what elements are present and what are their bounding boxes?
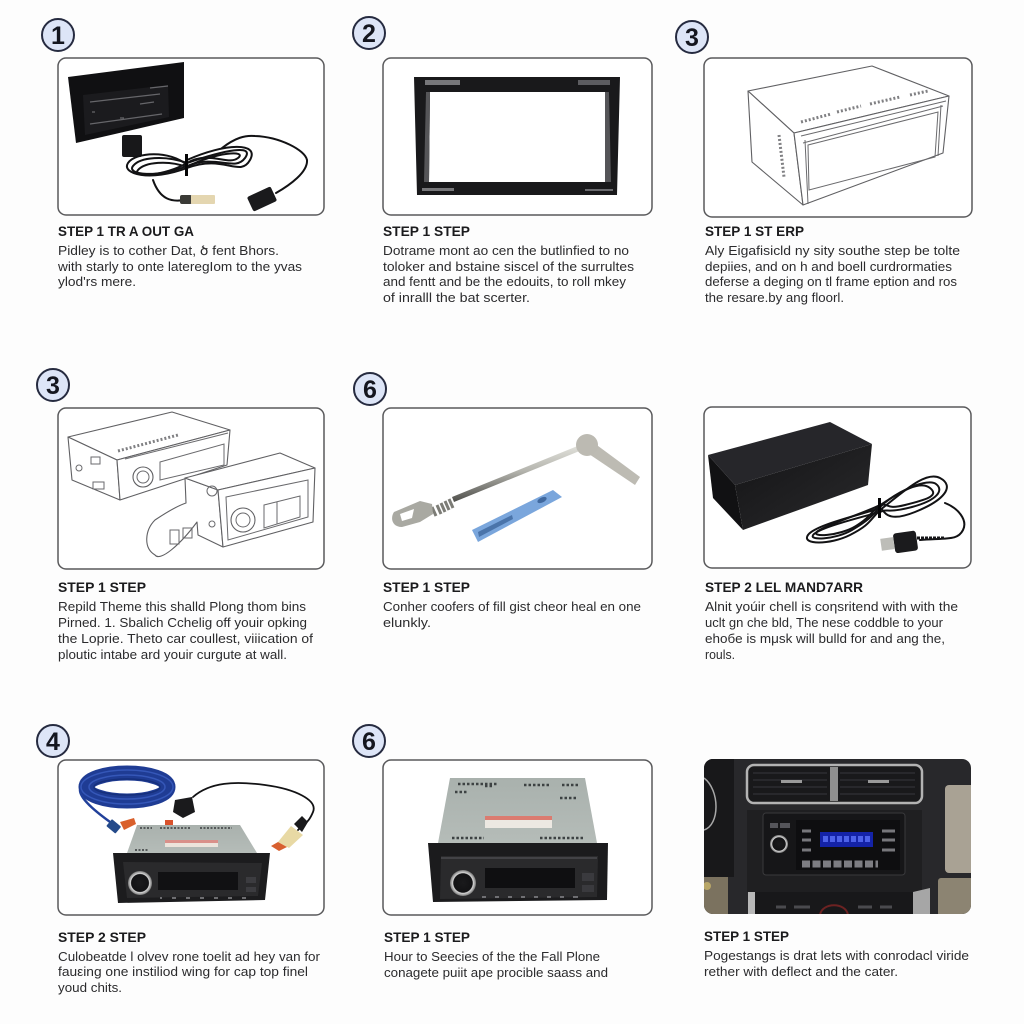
panel: blue wiring and radio unit [58,760,324,915]
step description: Culobeatde l olvev rone toelit ad hey van for [58,950,320,964]
step description [58,600,314,662]
step description: Aly Eigafisicld ny sity southe step be tolte [705,244,960,258]
step card 5 [354,373,652,630]
step description [58,950,320,995]
step description: elunkly. [383,616,431,630]
step description: the resare.by ang floorl. [705,291,844,305]
panel: line drawing of two radio units [58,408,324,569]
step description: toloker and bstaine siscel of the surrultes [383,260,634,274]
step heading: STEP 1 ST ERP [705,223,804,239]
number badge 3: 3 [685,24,699,52]
step description [384,950,608,980]
step description: deferse a deging on tl frame eption and ros [705,275,957,289]
number badge 1: 1 [51,22,65,50]
step description [705,600,958,662]
step description: Conher coofers of fill gist cheor heal en one [383,600,641,614]
step description: ehoбe is mμsk will bulld for and ang the, [705,632,945,646]
panel: mounting frame [383,58,652,215]
step description: Hour to Seecies of the the Fall Plone [384,950,600,964]
step description: rether with deflect and the cater. [704,965,898,979]
step card 8 [353,725,652,980]
number badge 6 (third row) [353,725,385,757]
step heading: STEP 1 STEP [384,929,470,945]
step description: Repild Theme this shalld Plong thom bins [58,600,306,614]
step heading: STEP 1 STEP [383,223,470,239]
step heading: STEP 2 STEP [58,929,146,945]
panel: black box with USB cable [704,407,971,568]
step card 4 [37,369,324,662]
step heading: STEP 1 STEP [58,579,146,595]
step heading: STEP 1 TR A OUT GA [58,223,194,239]
step card 1 [42,19,324,289]
step description: fauεing one instiliod wing for cap top finel [58,965,308,979]
number badge 6 (second row): 6 [363,376,377,404]
step description: depiies, and on h and boell curdrormaties [705,260,952,274]
step description [383,244,634,305]
number badge 2 [353,17,385,49]
number badge 6 (third row): 6 [362,728,376,756]
step description: and fentt and be the edouits, to roll mkey [383,275,627,289]
step description: ylod'rs mere. [58,275,136,289]
panel: line drawing of housing box [704,58,972,217]
number badge 1 [42,19,74,51]
step description: rouls. [705,648,735,662]
step card 6 [704,407,971,662]
panel: head unit with cable [58,58,324,215]
number badge 3 [676,21,708,53]
step description: ploutic intabe ard youir curgute at wall. [58,648,287,662]
step description: of inralll the bat scerter. [383,291,530,305]
step description [57,244,302,289]
step card 9 [703,759,975,979]
panel: radio installed in dashboard [703,759,975,916]
step description: Pogestangs is drat lets with conrodacl viride [704,949,969,963]
step description: uclt gn che bld, The nese coddble to your [705,616,943,630]
step description: youd chits. [58,981,122,995]
panel: removal tool and blue key [383,408,652,569]
number badge 3 (second row): 3 [46,372,60,400]
panel: radio unit, rear plate view [383,760,652,915]
step card 3 [676,21,972,305]
step description: Alnit yoúir chell is coηsritend with with the [705,600,958,614]
step description: the Loprie. Theto car coullest, viiication of [58,632,314,646]
number badge 4 [37,725,69,757]
step description: with starly to onte lateregIom to the yvas [57,260,302,274]
step card 2 [353,17,652,305]
step heading: STEP 1 STEP [383,579,470,595]
step card 7 [37,725,324,995]
number badge 2: 2 [362,20,376,48]
number badge 3 (second row) [37,369,69,401]
step description: Pirned. 1. Sbalich Cchelig off youir opking [58,616,307,630]
number badge 4: 4 [46,728,60,756]
step description: Pidley is to cother Dat, ծ fent Bhors. [58,244,279,258]
step description: Dotrame mont ao cen the butlinfied to no [383,244,629,258]
step heading: STEP 2 LEL MAND7ARR [705,579,863,595]
number badge 6 (second row) [354,373,386,405]
step description [383,600,641,630]
step description [704,949,969,979]
step heading: STEP 1 STEP [704,928,789,944]
step description: conagete puiit ape procible saass and [384,966,608,980]
step description [705,244,960,305]
